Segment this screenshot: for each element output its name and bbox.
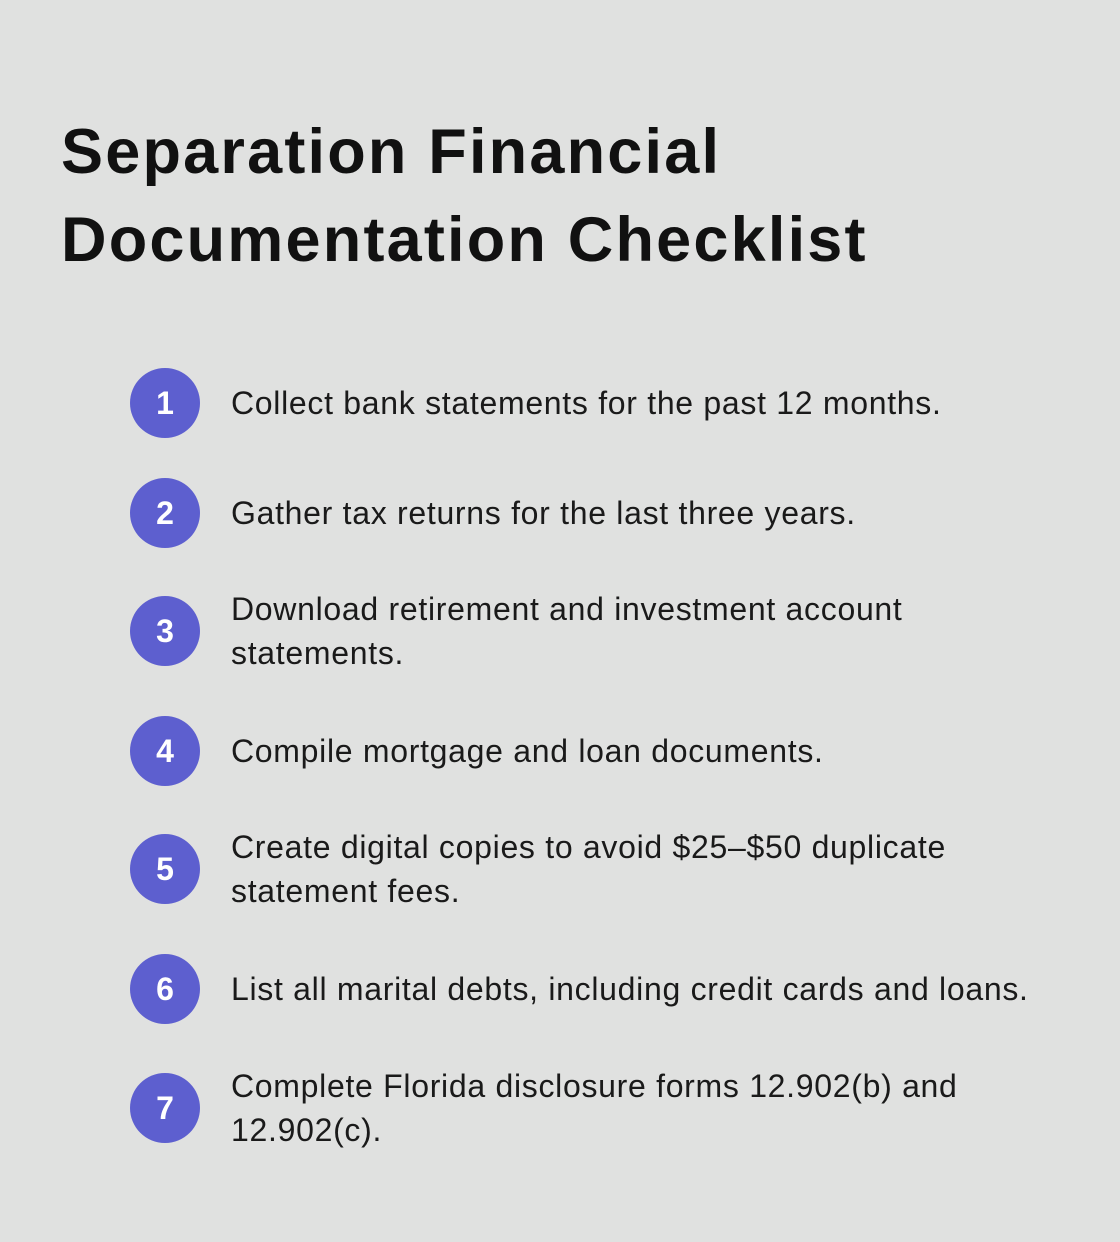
item 4: Compile mortgage and loan documents. xyxy=(231,733,824,769)
item 6: 6 xyxy=(156,971,174,1007)
item 3 xyxy=(130,591,903,671)
title xyxy=(61,117,868,275)
item 2: Gather tax returns for the last three years. xyxy=(231,495,856,531)
item 7: Complete Florida disclosure forms 12.902(b) and xyxy=(231,1068,958,1104)
item 1 xyxy=(130,368,942,438)
item 5: statement fees. xyxy=(231,873,460,909)
item 7: 7 xyxy=(156,1090,174,1126)
item 5: Create digital copies to avoid $25–$50 duplicate xyxy=(231,829,946,865)
item 1: Collect bank statements for the past 12 months. xyxy=(231,385,942,421)
item 3: 3 xyxy=(156,613,174,649)
item 6: List all marital debts, including credit cards and loans. xyxy=(231,971,1029,1007)
item 7 xyxy=(130,1068,958,1148)
item 4: 4 xyxy=(156,733,174,769)
item 4 xyxy=(130,716,824,786)
item 3: Download retirement and investment account xyxy=(231,591,903,627)
item 2: 2 xyxy=(156,495,174,531)
item 3: statements. xyxy=(231,635,404,671)
item 1: 1 xyxy=(156,385,174,421)
item 2 xyxy=(130,478,856,548)
item 5 xyxy=(130,829,946,909)
item 5: 5 xyxy=(156,851,174,887)
item 7: 12.902(c). xyxy=(231,1112,382,1148)
title: Separation Financial xyxy=(61,117,721,187)
item 6 xyxy=(130,954,1029,1024)
title: Documentation Checklist xyxy=(61,205,868,275)
